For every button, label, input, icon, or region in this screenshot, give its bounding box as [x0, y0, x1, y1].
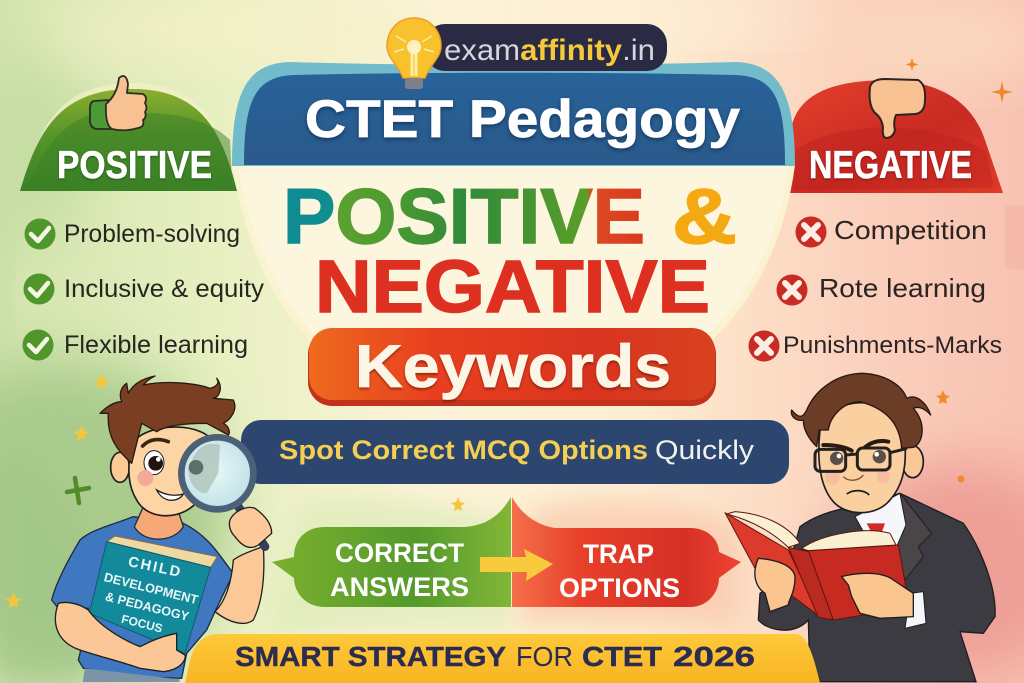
book: DEVELOPMENT: [103, 570, 200, 607]
left hand: [755, 558, 795, 612]
logo wordmark: examaffinity.in: [444, 34, 655, 67]
subtitle text: Spot Correct MCQ Options: [279, 435, 648, 465]
icon: check 2: [24, 274, 54, 304]
character: boy with magnifying glass and book: [52, 376, 272, 682]
keywords text: Keywords: [355, 333, 671, 400]
keywords pill: [308, 328, 716, 406]
panel: positive header dome: [20, 76, 237, 191]
right hand: [842, 573, 913, 618]
text: correct answers: ANSWERS: [330, 572, 469, 602]
text: trap options: OPTIONS: [559, 573, 680, 603]
lapel: [897, 493, 932, 580]
text: rote learning: Rote learning: [819, 273, 986, 303]
text: correct answers: CORRECT: [335, 538, 464, 568]
heading: negative: NEGATIVE: [809, 144, 972, 187]
hair: [791, 373, 931, 448]
title word: positive: POSITIVE: [283, 172, 645, 260]
footer word: for: FOR: [516, 641, 573, 672]
shirt collar: [855, 493, 907, 547]
subtitle bar: spot correct MCQ options quickly: [241, 420, 789, 484]
magnifying glass: [181, 437, 265, 547]
text: correct answers: [330, 538, 469, 602]
ear: [111, 452, 129, 482]
text: trap options: [559, 539, 680, 603]
glasses: [815, 448, 906, 471]
footer year: 2026: 2026: [673, 641, 755, 672]
heading: positive: POSITIVE: [57, 144, 212, 187]
panel: negative header dome: [790, 79, 1003, 193]
title word: negative: NEGATIVE: [315, 245, 710, 328]
face details: [823, 441, 890, 495]
red half: [512, 497, 741, 607]
book: [89, 536, 217, 653]
icon: check 3: [22, 330, 54, 360]
list: positive keywords: [22, 218, 265, 360]
text: competition: Competition: [834, 215, 987, 245]
title ampersand: &: [672, 172, 737, 260]
comparison banner: correct answers vs trap options: [272, 497, 741, 607]
icon: check 1: [24, 218, 56, 250]
icon: cross 3: [748, 330, 780, 362]
title: positive and negative: [283, 172, 737, 328]
arrow: correct to trap: [480, 549, 553, 581]
shirt: [52, 517, 233, 678]
neck: [134, 507, 183, 539]
red book: [725, 512, 907, 620]
footer word: CTET: CTET: [582, 641, 662, 672]
footer strip: smart strategy for CTET 2026: [185, 634, 820, 683]
logo: examaffinity.in: [387, 18, 667, 89]
book: CHILD: [127, 554, 184, 581]
text: problem-solving: Problem-solving: [64, 220, 240, 248]
list: negative keywords: [748, 215, 1002, 362]
icon: thumbs up: [90, 76, 146, 130]
book: & PEDAGOGY: [104, 590, 191, 624]
head: [819, 403, 905, 513]
hair: [100, 376, 235, 463]
left arm holding book: [55, 602, 185, 672]
text: punishments-marks: Punishments-Marks: [783, 332, 1002, 359]
cuff: [905, 592, 926, 628]
text: inclusive and equity: Inclusive & equity: [64, 275, 265, 303]
icon: light bulb: [387, 18, 441, 89]
character: serious man reading red book: [725, 373, 995, 682]
decorative sparkle stars: [5, 58, 1013, 608]
suit: [758, 493, 995, 682]
green half: [272, 497, 511, 607]
icon: cross 2: [776, 274, 808, 306]
icon: cross 1: [796, 216, 826, 248]
tie: [867, 523, 885, 535]
face details: [137, 440, 183, 500]
text: flexible learning: Flexible learning: [64, 331, 248, 359]
panel: central cream shield: [232, 165, 795, 400]
heading: CTET Pedagogy: CTET Pedagogy: [305, 90, 741, 149]
text: trap options: TRAP: [583, 539, 654, 569]
header banner: CTET Pedagogy: [232, 62, 795, 166]
right arm: [215, 547, 264, 623]
icon: thumbs down: [870, 79, 925, 138]
hand on handle: [229, 507, 272, 547]
footer text: SMART STRATEGY: [235, 641, 506, 672]
subtitle word: quickly: Quickly: [655, 435, 755, 465]
book: FOCUS: [120, 612, 164, 636]
ear: [902, 446, 923, 478]
head: [129, 427, 214, 516]
trousers: [83, 668, 180, 682]
